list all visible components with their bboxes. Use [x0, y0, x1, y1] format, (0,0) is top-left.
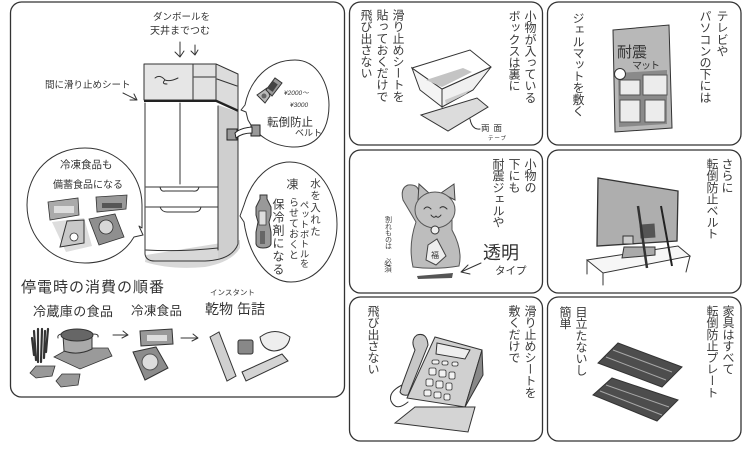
- text: belt tip: [705, 158, 734, 239]
- label: non-slip sheet between: [45, 79, 137, 100]
- label: non-slip sheet between: 間に滑り止めシート: [45, 79, 131, 91]
- labels: food categories: インスタント: [210, 288, 255, 297]
- illustration: TV on stand with belts: [587, 178, 690, 285]
- panel: phone non-slip sheet: [350, 297, 542, 441]
- callout: frozen PET bottle: 水を入れた: [309, 178, 321, 238]
- text: gel tip: [491, 158, 537, 228]
- illustration: frozen food: [133, 329, 173, 380]
- text: plate tip: 転倒防止プレート: [705, 305, 719, 398]
- callout: anti-tip belt: ¥2000〜: [284, 90, 309, 97]
- callout: frozen food as stock: 冷凍食品も: [60, 158, 112, 171]
- callout: frozen PET bottle: [240, 162, 337, 282]
- text: belt tip: 転倒防止ベルト: [705, 158, 719, 239]
- label: fragile items note: 割れものは: [384, 215, 392, 250]
- labels: food categories: 乾物 缶詰: [205, 301, 265, 317]
- callout: frozen PET bottle: 保冷剤になる: [271, 198, 285, 276]
- illustration: box with double-sided tape: [412, 50, 491, 131]
- panel: TV and PC gel mat: [548, 2, 741, 145]
- text: plate tip: 簡単: [558, 305, 572, 330]
- label: double-sided tape: 両面: [481, 123, 502, 133]
- text: box tip: 飛び出さない: [359, 9, 373, 79]
- illustration: dried and canned food: [210, 332, 290, 381]
- text: gel tip: 耐震ジェルや: [491, 158, 505, 228]
- callout: frozen food as stock: [27, 148, 143, 263]
- text: gel mat tip: ジェルマットを敷く: [571, 12, 585, 116]
- arrow: frozen to instant: [181, 334, 198, 341]
- heading: stack cardboard to ceiling: ダンボールを: [153, 11, 210, 23]
- callout: frozen food as stock: 備蓄食品になる: [53, 178, 123, 191]
- callout: anti-tip belt: ベルト: [295, 128, 322, 138]
- label: fragile items note: 必須: [383, 257, 392, 274]
- text: phone tip: [366, 305, 537, 398]
- illustration: maneki-neko: [402, 184, 460, 279]
- illustration: refrigerator: [144, 64, 240, 268]
- label: double-sided tape: テープ: [488, 135, 506, 142]
- text: belt tip: さらに: [720, 158, 734, 193]
- arrows: down to cardboard: [175, 42, 198, 57]
- illustration: gel mat package: [613, 25, 672, 132]
- callout: frozen PET bottle: らせておくと: [286, 197, 298, 260]
- callout: frozen PET bottle: 凍: [285, 178, 299, 190]
- label: transparent type: タイプ: [495, 265, 527, 277]
- label: fragile items note: [383, 215, 392, 274]
- callout: anti-tip belt: ¥3000: [290, 102, 308, 109]
- heading: consumption order during outage: 停電時の消費の順番: [21, 279, 164, 296]
- illustration: gel mat package: 耐震: [617, 44, 647, 61]
- text: gel mat tip: [571, 10, 729, 116]
- text: plate tip: 目立たないし: [574, 306, 588, 376]
- text: gel tip: 下にも: [507, 158, 521, 193]
- panel: small items gel: [350, 150, 542, 293]
- text: plate tip: 家具はすべて: [721, 305, 735, 375]
- icon: belt bracket: [257, 78, 282, 103]
- labels: food categories: [33, 288, 265, 319]
- icon: PET bottle: [256, 195, 271, 248]
- text: gel mat tip: テレビや: [715, 10, 729, 56]
- arrow: fridge food to frozen: [113, 331, 128, 338]
- text: box tip: ボックスは裏に: [507, 10, 521, 91]
- label: transparent type: 透明: [483, 243, 519, 263]
- text: gel mat tip: パソコンの下には: [698, 10, 712, 103]
- illustration: two anti-tip plates: [593, 343, 682, 421]
- labels: food categories: 冷蔵庫の食品: [33, 304, 113, 319]
- illustration: maneki-neko: 福: [431, 250, 439, 260]
- text: phone tip: 飛び出さない: [366, 305, 380, 375]
- label: transparent type: [461, 243, 527, 277]
- callout: anti-tip belt: [227, 60, 329, 147]
- text: phone tip: 敷くだけで: [507, 305, 521, 363]
- panel: TV anti-tip belt: [548, 150, 741, 293]
- callout: anti-tip belt: 転倒防止: [267, 115, 313, 129]
- illustration: refrigerator food with pot on stove: [30, 329, 112, 387]
- panel: anti-tip plate: [548, 297, 741, 441]
- panel: small items box: [350, 2, 542, 145]
- text: phone tip: 滑り止めシートを: [523, 305, 537, 398]
- text: box tip: 貼っておくだけで: [375, 8, 389, 102]
- text: plate tip: [558, 305, 735, 398]
- panel: refrigerator and power-outage food order: [10, 2, 344, 397]
- text: box tip: 滑り止めシートを: [391, 9, 405, 102]
- illustration: desk phone on sheet: [390, 334, 483, 432]
- icon: frozen food packs: [48, 195, 127, 252]
- labels: food categories: 冷凍食品: [131, 303, 182, 318]
- text: box tip: 小物が入っている: [523, 10, 537, 103]
- icon: belt on fridge: [227, 125, 260, 140]
- text: gel tip: 小物の: [523, 158, 537, 193]
- label: double-sided tape: [481, 123, 506, 142]
- text: box tip: [359, 8, 537, 103]
- illustration: gel mat package: マット: [632, 61, 660, 72]
- heading: stack cardboard to ceiling: 天井までつむ: [150, 24, 210, 37]
- heading: stack cardboard to ceiling: [150, 11, 210, 37]
- callout: frozen PET bottle: ペットボトルを: [298, 200, 309, 269]
